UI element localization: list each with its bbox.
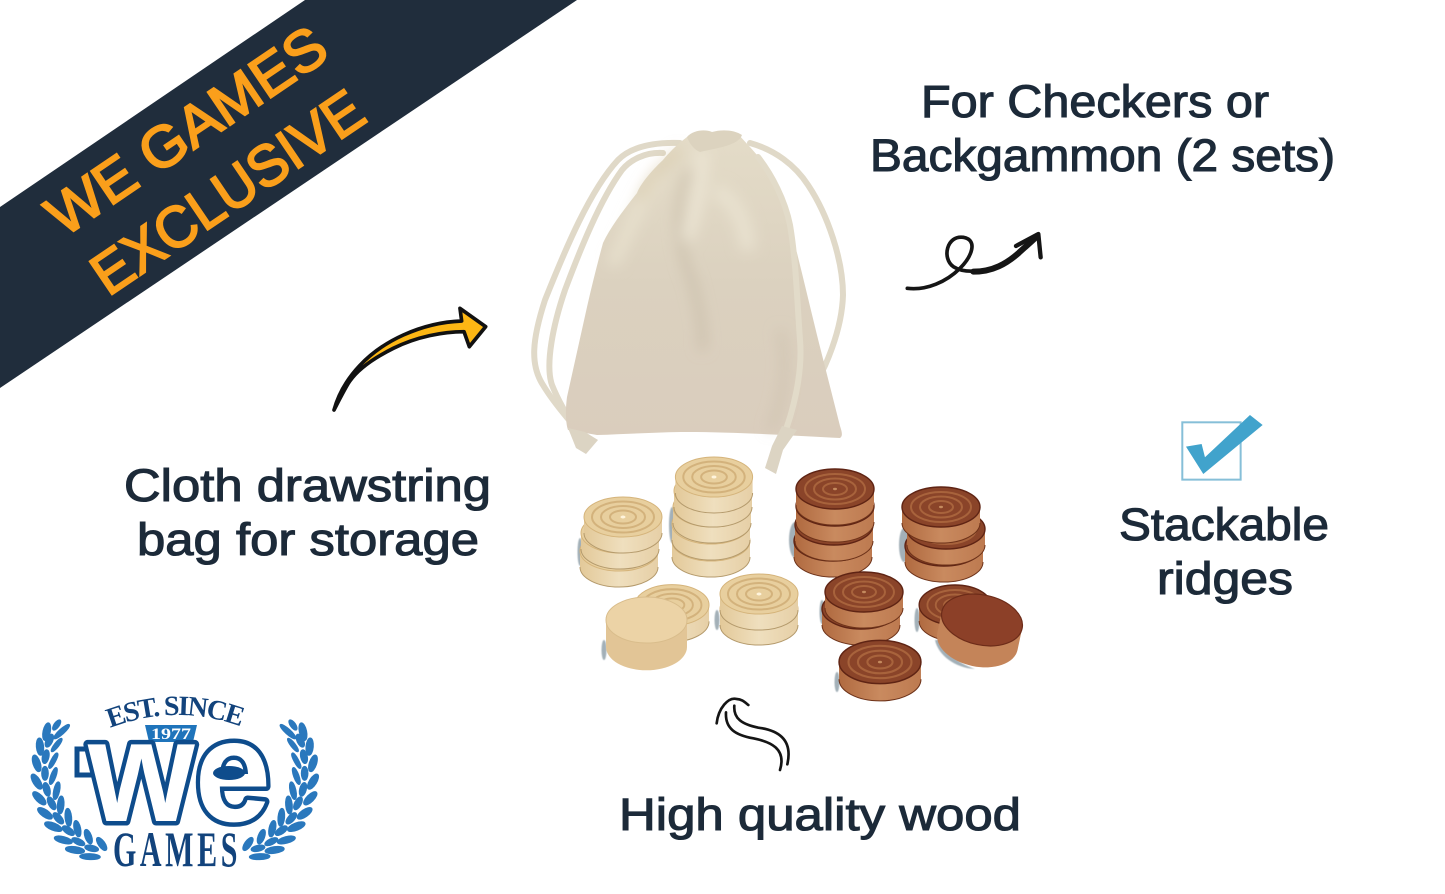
- logo est since: [110, 715, 245, 728]
- label: stackable ridges: [1119, 499, 1329, 604]
- front cord: [758, 157, 801, 437]
- heading: for checkers or backgammon: For Checkers or: [921, 76, 1269, 127]
- drawstring cords behind: [534, 143, 843, 433]
- cloth drawstring bag: [534, 130, 843, 474]
- banner text: WE GAMES: [34, 13, 339, 249]
- label: cloth drawstring bag: [124, 460, 491, 565]
- dark loose pieces: [822, 572, 1027, 701]
- logo: WE Games: [30, 690, 319, 877]
- logo laurels: [29, 719, 320, 860]
- cord knots: [568, 426, 797, 474]
- bag neck: [687, 130, 742, 152]
- logo year tag: 1977: [151, 726, 191, 743]
- dark stack tall: [794, 469, 874, 577]
- label: cloth drawstring bag: bag for storage: [137, 514, 479, 565]
- dark stack right: [902, 487, 985, 582]
- logo we mark: we: [87, 690, 271, 852]
- light stack left: [580, 497, 662, 587]
- logo games: GAMES: [113, 821, 241, 877]
- logo: WE Games: EST. SINCE: [104, 696, 244, 728]
- bag folds: [612, 150, 784, 430]
- arrow: squiggle to pieces: [717, 699, 789, 770]
- dark upturned piece: [932, 587, 1027, 674]
- heading: for checkers or backgammon: [870, 76, 1335, 181]
- banner text: EXCLUSIVE: [79, 77, 376, 308]
- wooden checkers: [578, 457, 1027, 701]
- heading: for checkers or backgammon: Backgammon (2 sets): [870, 130, 1335, 181]
- banner text: [34, 13, 381, 310]
- logo year tag: [145, 725, 197, 743]
- light stack tall: [672, 457, 753, 577]
- label: high quality wood: High quality wood: [619, 789, 1021, 840]
- label: cloth drawstring bag: Cloth drawstring: [124, 460, 491, 511]
- label: stackable ridges: Stackable: [1119, 499, 1329, 550]
- piece shadows: [578, 507, 975, 692]
- light loose pieces: [606, 574, 798, 670]
- label: stackable ridges: ridges: [1157, 553, 1293, 604]
- logo we mark: we: [87, 690, 271, 852]
- icon: checkbox: [1182, 415, 1263, 480]
- banner: WE Games Exclusive: [0, 0, 577, 388]
- arrow: black loop: [907, 234, 1041, 289]
- arrow: yellow curved to bag: [334, 308, 486, 410]
